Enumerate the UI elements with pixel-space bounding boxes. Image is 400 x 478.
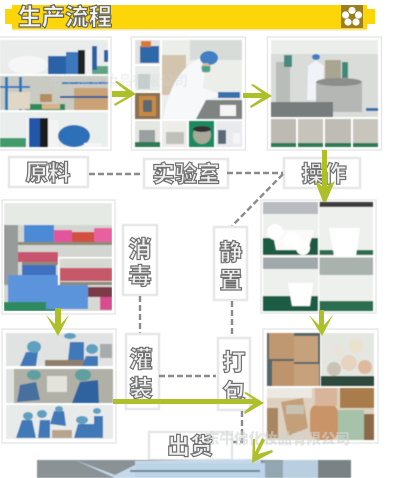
label: laboratory — [144, 159, 228, 188]
panel: filling photos — [2, 329, 116, 443]
panel: laboratory photos — [132, 37, 246, 150]
label: settling: 置 — [220, 267, 242, 293]
label: disinfection: 毒 — [128, 263, 152, 289]
arrow: disinfection to filling — [46, 308, 69, 336]
label: shipping: 出货 — [167, 433, 213, 459]
label: disinfection — [123, 225, 157, 295]
dashed connector: disinfection to filling — [139, 296, 141, 333]
arrow: operation to settling — [315, 150, 335, 202]
dashed connector: settling to packing — [231, 301, 233, 337]
panel: operation photos — [268, 37, 382, 150]
label: settling: 静 — [220, 239, 242, 265]
label: settling — [214, 227, 247, 300]
arrow: settling to packing — [309, 310, 333, 336]
dashed connector: raw materials to lab — [89, 173, 140, 175]
panel: disinfection photo — [2, 200, 115, 314]
watermark top: 市牛佛化妆品有限公司 — [48, 73, 188, 89]
building photo — [37, 459, 351, 478]
label: operation: 操作 — [301, 162, 347, 187]
label: laboratory: 实验室 — [152, 161, 220, 187]
arrow: raw materials to lab — [112, 81, 136, 106]
icon: flower — [341, 5, 363, 28]
label: filling: 灌 — [130, 346, 152, 372]
dashed connector: lab to operation — [227, 172, 283, 174]
label: packing — [218, 338, 250, 410]
panel: raw materials photos — [0, 37, 111, 150]
label: operation — [284, 158, 360, 188]
heading: production process: 生产流程 — [18, 4, 112, 30]
label: raw materials: 原料 — [25, 161, 71, 186]
label: raw materials — [9, 157, 88, 187]
label: filling: 装 — [130, 375, 152, 401]
title banner — [5, 4, 375, 30]
panel: packing photos — [263, 329, 378, 443]
arrow: lab to operation — [243, 84, 272, 108]
arrow: filling to packing — [113, 392, 264, 414]
arrow: packing to shipment — [252, 438, 273, 463]
dashed connector: packing to shipping — [232, 411, 242, 442]
panel: settling buckets photo — [261, 200, 376, 313]
dashed connector: operation to settling — [232, 174, 283, 226]
label: shipping — [149, 432, 232, 460]
label: filling — [126, 334, 159, 409]
label: packing: 包 — [222, 379, 246, 405]
label: disinfection: 消 — [128, 236, 152, 262]
dashed connector: filling to packing — [159, 375, 216, 377]
watermark bottom: 东牛佛化妆品有限公司 — [205, 430, 350, 448]
label: packing: 打 — [222, 349, 246, 375]
